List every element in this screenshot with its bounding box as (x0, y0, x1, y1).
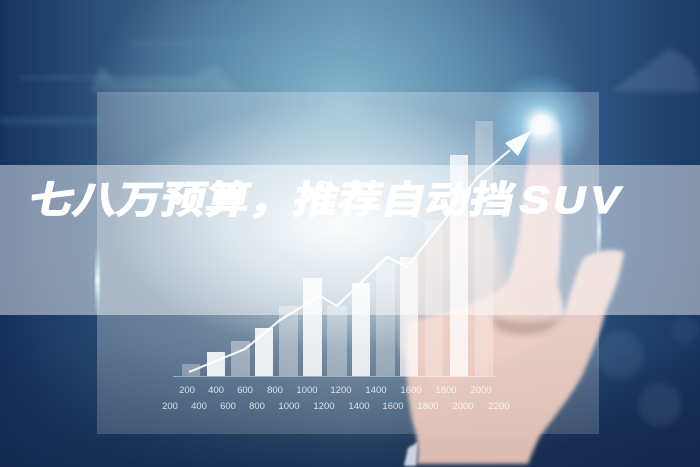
folded fingers (398, 214, 545, 390)
title: 七八万预算，推荐自动挡SUV (25, 178, 629, 221)
bar chart (173, 121, 495, 377)
axis row one: 1400 (365, 385, 387, 396)
axis row two: 1800 (417, 401, 439, 412)
axis row one: 400 (208, 385, 224, 396)
central glow (110, 100, 570, 350)
axis row two: 1000 (278, 401, 300, 412)
hand (398, 115, 624, 464)
axis row one: 2000 (470, 385, 492, 396)
title band (0, 165, 700, 315)
axis row one: 1800 (435, 385, 457, 396)
axis row two: 600 (220, 401, 236, 412)
fingertip glow (489, 73, 593, 177)
axis row one: 200 (179, 385, 195, 396)
glass panel (97, 92, 599, 434)
panel edge light right (597, 195, 601, 265)
axis row two: 1600 (382, 401, 404, 412)
axis row two: 200 (162, 401, 178, 412)
index finger and palm (406, 115, 624, 464)
axis row one (179, 385, 492, 396)
axis row two (162, 401, 510, 412)
axis labels (162, 385, 510, 412)
palm crease shadow (490, 316, 562, 335)
axis row one: 1000 (296, 385, 318, 396)
axis row two: 400 (191, 401, 207, 412)
axis row two: 2200 (488, 401, 510, 412)
axis row two: 1200 (313, 401, 335, 412)
axis row one: 1600 (400, 385, 422, 396)
trend line arrow (189, 130, 532, 372)
axis row one: 600 (237, 385, 253, 396)
axis row two: 1400 (348, 401, 370, 412)
axis row two: 2000 (452, 401, 474, 412)
axis row one: 800 (267, 385, 283, 396)
axis row one: 1200 (330, 385, 352, 396)
shirt cuff (404, 442, 418, 466)
panel edge light left (95, 245, 100, 315)
axis row two: 800 (249, 401, 265, 412)
